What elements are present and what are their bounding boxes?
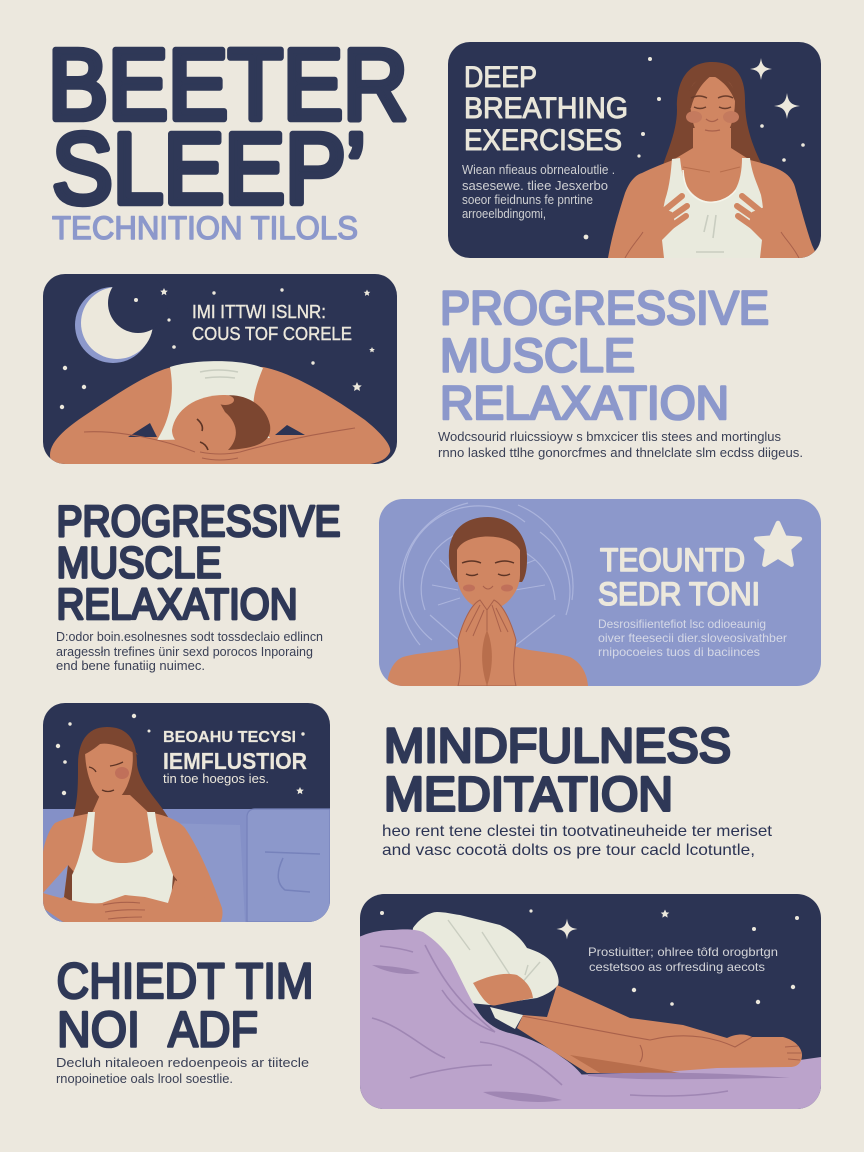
heading: progressive muscle relaxation (periwinkle): RELAXATION — [440, 377, 729, 430]
panel body text: soeor fieidnuns fe pnrtine — [462, 193, 593, 207]
heading: chiedt tim: ADF — [168, 1000, 258, 1058]
panel: belly breathing on sofa — [43, 703, 330, 932]
icon: crescent moon — [75, 287, 152, 363]
panel body text — [462, 163, 615, 221]
bed sheet — [560, 1057, 821, 1109]
heading: progressive muscle relaxation (periwinkle) — [440, 282, 769, 430]
panel heading: IEMFLUSTIOR — [163, 748, 307, 774]
woman breathing with hands on chest — [608, 62, 818, 258]
panel body text — [589, 948, 778, 974]
panel body text: rnipocoeies tuos di baciinces — [598, 645, 760, 659]
title line: SLEEP: SLEEP’ — [52, 113, 366, 225]
panel heading — [598, 548, 758, 606]
panel heading: IMI ITTWI ISLNR: — [192, 301, 326, 322]
panel body text: arroeelbdingomi, — [462, 207, 546, 221]
panel body text: cestetsoo as orfresding aecots — [589, 960, 765, 974]
panel heading: TEOUNTD — [600, 542, 745, 578]
heading: mindfulness meditation — [384, 719, 731, 822]
panel heading — [163, 729, 307, 786]
woman with hands on belly — [43, 727, 223, 932]
text block: chiedt description: rnopoinetioe oals lrool soestlie. — [56, 1072, 233, 1086]
heading: mindfulness meditation: MEDITATION — [384, 768, 673, 822]
text block: mindfulness description: and vasc cocotä dolts os pre tour cacld lcotuntle, — [382, 842, 755, 859]
panel body text: Prostiuitter; ohlree tôfd orogbrtgn — [588, 945, 778, 959]
stars — [60, 288, 375, 409]
panel: deep breathing exercises — [448, 42, 821, 258]
stars — [380, 909, 799, 1006]
panel body text: oiver fteesecii dier.sloveosivathber — [598, 631, 787, 645]
panel body text: Desrosifiientefiot lsc odioeaunig — [598, 617, 766, 631]
panel body text — [598, 617, 787, 659]
text block: chiedt description — [56, 1056, 309, 1086]
text block: progressive description: D:odor boin.esolnesnes sodt tossdeclaio edlincn — [56, 630, 323, 644]
heading: mindfulness meditation: MINDFULNESS — [384, 719, 731, 773]
heading: progressive muscle relaxation (navy): PROGRESSIVE — [56, 498, 340, 546]
text block: mindfulness description: heo rent tene clestei tin tootvatineuheide ter meriset — [382, 823, 773, 840]
panel body text: Wiean nfieaus obrneaIoutlie . — [462, 163, 615, 177]
text block: muscle relaxation description: rnno lasked ttlhe gonorcfmes and thnelclate slm ecdss diigeus. — [438, 445, 803, 460]
heading: chiedt tim: CHIEDT TIM — [56, 952, 314, 1009]
heading: chiedt tim: NOI — [57, 1000, 140, 1058]
title line: BEETER: BEETER — [48, 29, 408, 141]
panel heading — [466, 66, 626, 151]
person resting head on arms — [50, 361, 390, 465]
heading: progressive muscle relaxation (navy) — [56, 498, 340, 629]
heading: progressive muscle relaxation (periwinkle): MUSCLE — [440, 330, 635, 382]
text block: muscle relaxation description — [438, 429, 803, 460]
sofa cushions — [43, 809, 330, 922]
icon: star — [756, 523, 800, 565]
heading: progressive muscle relaxation (navy): RELAXATION — [56, 581, 298, 629]
heading: chiedt tim — [56, 952, 314, 1058]
panel body text: sasesewe. tliee Jesxerbo — [462, 179, 608, 193]
person with hands pressed near face — [387, 517, 588, 686]
text block: muscle relaxation description: Wodcsourid rluicssioyw s bmxcicer tlis stees and mortinglus — [438, 429, 781, 444]
title — [48, 29, 408, 246]
heading: progressive muscle relaxation (navy): MUSCLE — [56, 540, 222, 588]
panel heading — [192, 304, 352, 340]
stars — [584, 57, 805, 239]
text block: progressive description: aragessłn trefines ünir sexd porocos Inporaing — [56, 645, 313, 659]
stars — [56, 714, 305, 795]
panel heading: EXERCISES — [464, 124, 622, 157]
text block: mindfulness description — [382, 823, 773, 859]
heading: progressive muscle relaxation (periwinkle): PROGRESSIVE — [440, 282, 769, 335]
sleeping person legs and shirt — [410, 912, 802, 1073]
text block: chiedt description: Decluh nitaleoen redoenpeois ar tiitecle — [56, 1056, 309, 1070]
concentric calming rings — [400, 503, 573, 650]
lilac blanket — [359, 929, 790, 1109]
panel heading: DEEP — [464, 61, 537, 94]
panel: sleeping under lilac blanket — [359, 894, 821, 1109]
panel heading: BEOAHU TECYSI — [163, 729, 296, 746]
panel: sleeping on folded arms with moon — [43, 273, 397, 465]
text block: progressive description — [56, 630, 323, 673]
panel heading: COUS TOF CORELE — [192, 323, 352, 344]
panel heading: BREATHING — [464, 92, 628, 125]
text block: progressive description: end bene funatiig nuimec. — [56, 659, 205, 673]
subtitle: TECHNITION TILOLS — [52, 210, 358, 246]
panel heading: tin toe hoegos ies. — [163, 772, 269, 786]
panel heading: SEDR TONI — [598, 576, 760, 612]
panel: periwinkle card with face and star — [379, 499, 821, 686]
